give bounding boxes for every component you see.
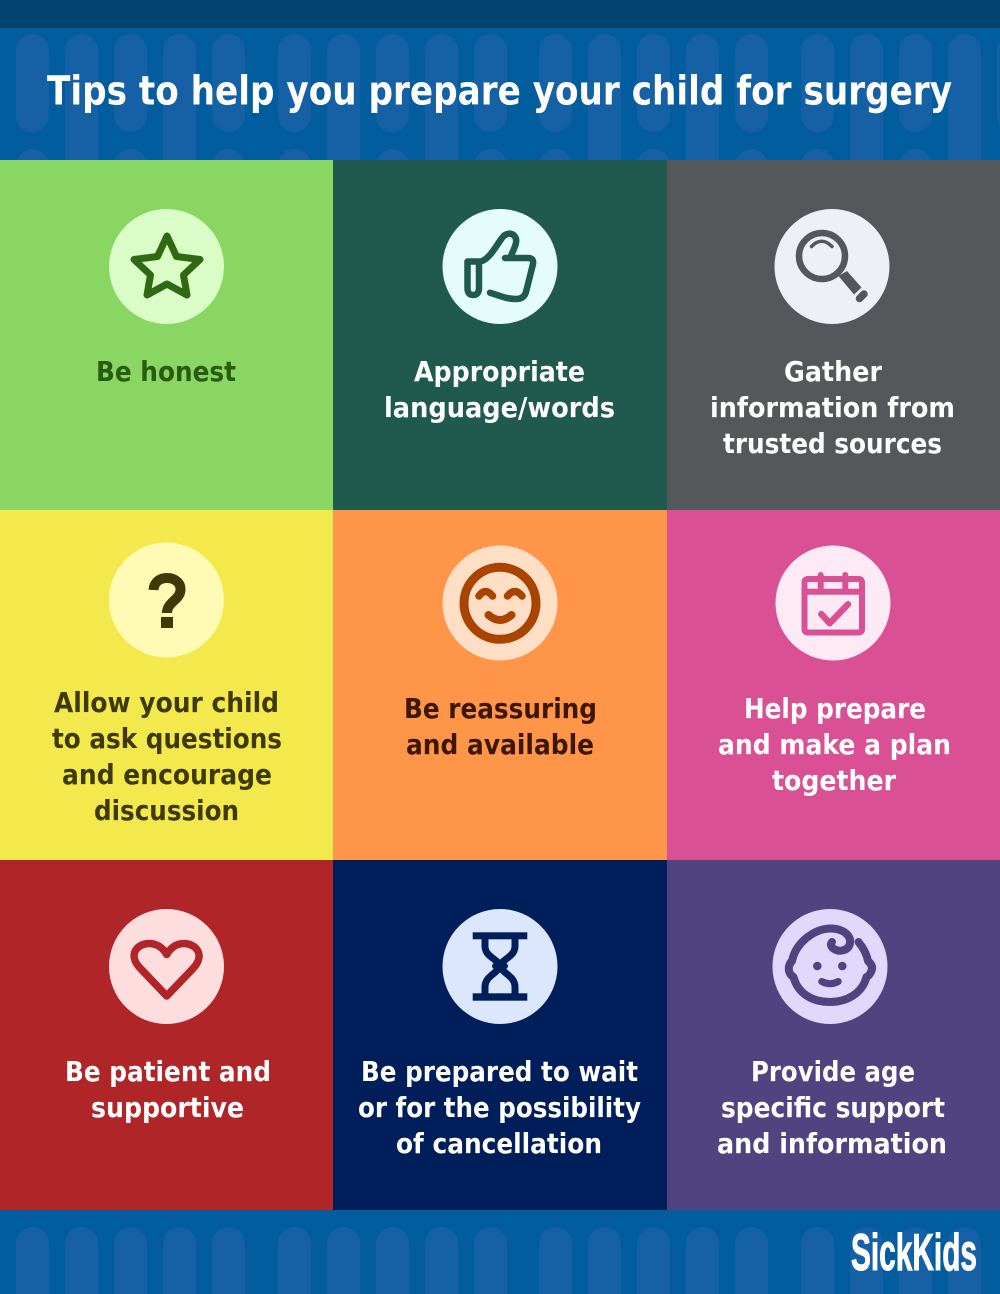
panel: be prepared to wait (333, 860, 667, 1210)
label: be prepared to wait: of cancellation (396, 1127, 602, 1160)
icon: smiling face (442, 546, 558, 660)
panel: gather information (667, 160, 1000, 510)
header band (0, 0, 1000, 160)
label: gather information: information from (710, 391, 955, 424)
icon: magnifying glass (774, 209, 890, 324)
label: be prepared to wait (358, 1055, 641, 1160)
label: be prepared to wait: Be prepared to wait (361, 1055, 638, 1088)
label: allow questions (52, 686, 282, 827)
label: make a plan: together (772, 764, 896, 797)
icon: question mark (109, 542, 224, 658)
icon: star (109, 209, 224, 324)
panel: age specific support (667, 860, 1000, 1210)
label: gather information: trusted sources (723, 427, 942, 460)
label: age specific support (717, 1055, 947, 1160)
label: be patient: supportive (91, 1091, 244, 1124)
label: allow questions: and encourage (62, 758, 272, 791)
label: appropriate language (384, 355, 615, 424)
panel: appropriate language (333, 160, 667, 510)
label: gather information (710, 355, 955, 460)
label: age specific support: Provide age (751, 1055, 915, 1088)
icon: calendar (776, 546, 890, 660)
label: be reassuring (404, 692, 597, 761)
label: age specific support: specific support (721, 1091, 945, 1124)
icon: baby face (772, 909, 888, 1024)
label: make a plan (718, 692, 951, 797)
label: age specific support: and information (717, 1127, 947, 1160)
label: make a plan: Help prepare (744, 692, 926, 725)
panel: be honest (0, 160, 333, 510)
label: be prepared to wait: or for the possibility (358, 1091, 641, 1124)
icon: thumbs up (442, 209, 558, 324)
label: be patient: Be patient and (65, 1055, 271, 1088)
icon: heart (109, 909, 224, 1024)
panel: make a plan (667, 510, 1000, 860)
label: appropriate language: Appropriate (414, 355, 585, 388)
panel: allow questions (0, 510, 333, 860)
panel: be reassuring (333, 510, 667, 860)
label: allow questions: Allow your child (54, 686, 279, 719)
label: gather information: Gather (784, 355, 882, 388)
footer band (0, 1210, 1000, 1294)
label: allow questions: discussion (94, 794, 239, 827)
icon: hourglass (442, 909, 558, 1024)
label: allow questions: to ask questions (52, 722, 282, 755)
label: be honest: Be honest (96, 355, 236, 388)
label: be patient (65, 1055, 271, 1124)
label: make a plan: and make a plan (718, 728, 951, 761)
label: be reassuring: and available (406, 728, 594, 761)
panel: be patient (0, 860, 333, 1210)
label: appropriate language: language/words (384, 391, 615, 424)
label: be reassuring: Be reassuring (404, 692, 597, 725)
